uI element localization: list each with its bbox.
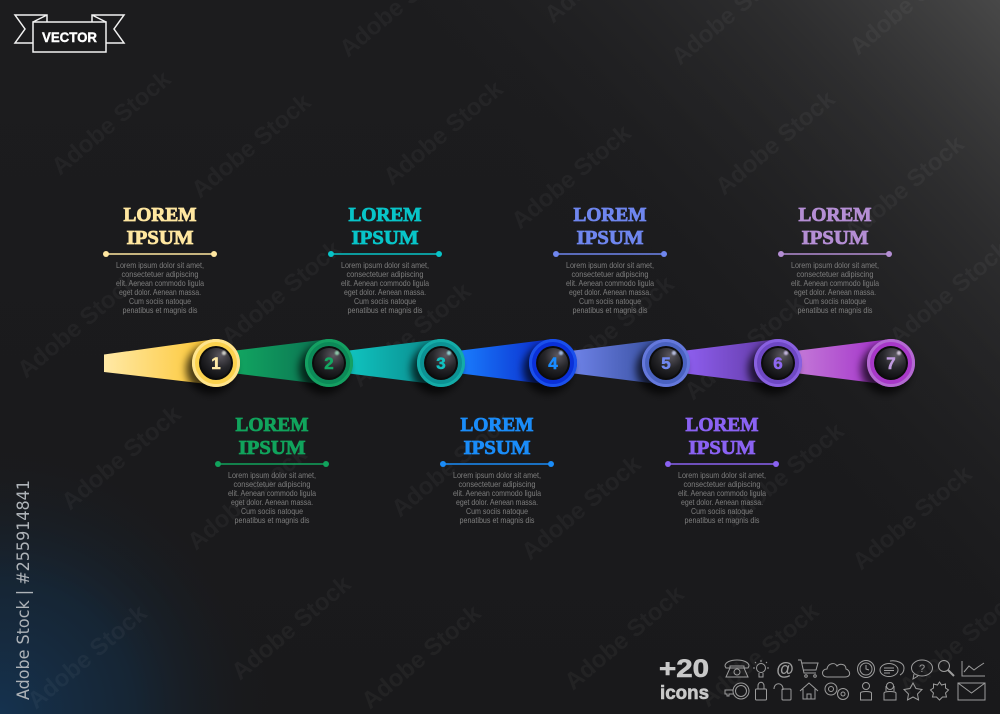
icon: woman bbox=[884, 682, 896, 700]
watermark pattern: Adobe Stock bbox=[227, 570, 357, 686]
vector ribbon badge bbox=[15, 15, 124, 52]
watermark pattern: Adobe Stock bbox=[23, 599, 153, 714]
icon: house bbox=[800, 683, 818, 699]
watermark pattern: Adobe Stock bbox=[507, 119, 637, 235]
text block 2: penatibus et magnis dis bbox=[234, 515, 310, 525]
watermark pattern: Adobe Stock bbox=[517, 450, 647, 566]
text block 7: Lorem ipsum dolor sit amet, bbox=[791, 260, 879, 270]
icon: lock bbox=[756, 682, 766, 700]
step 2 marker bbox=[299, 339, 353, 394]
text block 3: eget dolor. Aenean massa. bbox=[344, 287, 426, 297]
text block 5: penatibus et magnis dis bbox=[572, 305, 648, 315]
text block 4: Cum sociis natoque bbox=[466, 506, 528, 516]
watermark pattern: Adobe Stock bbox=[695, 597, 825, 713]
text block 7: penatibus et magnis dis bbox=[798, 305, 872, 315]
watermark pattern: Adobe Stock bbox=[680, 290, 810, 406]
text block 5: LOREM bbox=[574, 204, 647, 226]
text block 6: consectetuer adipiscing bbox=[684, 479, 761, 489]
text block 4: LOREM bbox=[460, 414, 534, 436]
watermark pattern: Adobe Stock bbox=[183, 440, 313, 556]
text block 3 bbox=[328, 204, 442, 315]
stock id vertical text: Adobe Stock | #255914841 bbox=[14, 480, 34, 700]
text block 5: elit. Aenean commodo ligula bbox=[566, 278, 654, 288]
text block 4: Lorem ipsum dolor sit amet, bbox=[453, 470, 541, 480]
text block 3: penatibus et magnis dis bbox=[348, 305, 422, 315]
watermark pattern: Adobe Stock bbox=[13, 268, 143, 384]
icon set bbox=[725, 659, 985, 700]
text block 3: IPSUM bbox=[352, 227, 419, 249]
text block 7: LOREM bbox=[798, 204, 872, 226]
+20 icons label bbox=[659, 655, 709, 704]
text block 1: LOREM bbox=[124, 204, 197, 226]
text block 5: eget dolor. Aenean massa. bbox=[569, 287, 651, 297]
watermark pattern: Adobe Stock bbox=[840, 130, 970, 246]
watermark pattern: Adobe Stock bbox=[848, 460, 978, 576]
watermark pattern: Adobe Stock bbox=[560, 580, 690, 696]
text block 3: elit. Aenean commodo ligula bbox=[341, 278, 429, 288]
step 6 marker bbox=[748, 339, 802, 394]
text block 4: elit. Aenean commodo ligula bbox=[453, 488, 541, 498]
watermark pattern: Adobe Stock bbox=[217, 235, 347, 351]
text block 6: Lorem ipsum dolor sit amet, bbox=[678, 470, 766, 480]
step 2 marker: 2 bbox=[324, 354, 334, 373]
text block 6 bbox=[665, 414, 779, 525]
step 5 marker bbox=[636, 339, 690, 394]
icon: person bbox=[860, 682, 872, 700]
text block 6: LOREM bbox=[686, 414, 759, 436]
vector ribbon badge: VECTOR bbox=[42, 29, 97, 45]
watermark pattern: Adobe Stock bbox=[550, 270, 680, 386]
icon: cart bbox=[798, 660, 818, 677]
text block 3: consectetuer adipiscing bbox=[346, 269, 424, 279]
watermark pattern: Adobe Stock bbox=[47, 65, 177, 181]
text block 5: Cum sociis natoque bbox=[579, 296, 641, 306]
watermark pattern: Adobe Stock bbox=[387, 407, 517, 523]
icon: star bbox=[904, 683, 922, 700]
text block 7: Cum sociis natoque bbox=[804, 296, 866, 306]
text block 1 bbox=[103, 204, 217, 315]
text block 6: IPSUM bbox=[688, 437, 756, 459]
text block 7: consectetuer adipiscing bbox=[796, 269, 874, 279]
text block 1: penatibus et magnis dis bbox=[122, 305, 198, 315]
step 1 marker: 1 bbox=[211, 354, 221, 373]
text block 7: IPSUM bbox=[802, 227, 869, 249]
icon: at sign: @ bbox=[776, 659, 794, 679]
icon: magnifier bbox=[938, 660, 954, 676]
step 1 marker bbox=[186, 339, 240, 394]
step 6 marker: 6 bbox=[773, 354, 783, 373]
text block 2: IPSUM bbox=[238, 437, 306, 459]
text block 7 bbox=[778, 204, 892, 315]
text block 4: IPSUM bbox=[464, 437, 531, 459]
step 7 marker bbox=[861, 339, 915, 394]
text block 1: IPSUM bbox=[126, 227, 194, 249]
icon: line chart bbox=[962, 661, 985, 676]
watermark pattern: Adobe Stock bbox=[187, 88, 317, 204]
icon: clock bbox=[858, 660, 874, 678]
text block 1: Cum sociis natoque bbox=[129, 296, 191, 306]
text block 5: IPSUM bbox=[576, 227, 644, 249]
text block 4 bbox=[440, 414, 554, 525]
text block 6: eget dolor. Aenean massa. bbox=[681, 497, 763, 507]
step 4 marker: 4 bbox=[548, 354, 558, 373]
timeline wedges bbox=[104, 339, 891, 385]
text block 6: elit. Aenean commodo ligula bbox=[678, 488, 766, 498]
+20 icons label: icons bbox=[660, 683, 709, 704]
watermark pattern: Adobe Stock bbox=[720, 417, 850, 533]
icon: light bulb bbox=[753, 660, 769, 677]
text block 1: elit. Aenean commodo ligula bbox=[116, 278, 204, 288]
watermark pattern: Adobe Stock bbox=[57, 400, 187, 516]
+20 icons label: +20 bbox=[659, 655, 709, 683]
watermark pattern: Adobe Stock bbox=[379, 75, 509, 191]
text block 5: Lorem ipsum dolor sit amet, bbox=[566, 260, 654, 270]
icon: gears bbox=[825, 683, 848, 700]
icon: envelope bbox=[958, 683, 985, 700]
step 4 marker bbox=[523, 339, 577, 394]
text block 6: Cum sociis natoque bbox=[691, 506, 753, 516]
icon: chat bubbles bbox=[880, 661, 904, 676]
step 5 marker: 5 bbox=[661, 354, 671, 373]
text block 3: LOREM bbox=[348, 204, 422, 226]
text block 7: eget dolor. Aenean massa. bbox=[794, 287, 876, 297]
icon: open lock bbox=[774, 684, 791, 700]
text block 6: penatibus et magnis dis bbox=[684, 515, 760, 525]
icon: cloud bbox=[822, 664, 850, 677]
text block 3: Lorem ipsum dolor sit amet, bbox=[341, 260, 429, 270]
text block 1: consectetuer adipiscing bbox=[122, 269, 199, 279]
step 3 marker: 3 bbox=[436, 354, 446, 373]
text block 2 bbox=[215, 414, 329, 525]
text block 2: elit. Aenean commodo ligula bbox=[228, 488, 316, 498]
text block 2: eget dolor. Aenean massa. bbox=[231, 497, 313, 507]
icon: telephone bbox=[725, 660, 749, 677]
watermark pattern: Adobe Stock bbox=[711, 85, 841, 201]
text block 4: penatibus et magnis dis bbox=[460, 515, 534, 525]
step 3 marker bbox=[411, 339, 465, 394]
icon: badge bbox=[930, 682, 948, 700]
text block 1: eget dolor. Aenean massa. bbox=[119, 287, 201, 297]
text block 4: eget dolor. Aenean massa. bbox=[456, 497, 538, 507]
text block 5: consectetuer adipiscing bbox=[572, 269, 649, 279]
text block 7: elit. Aenean commodo ligula bbox=[791, 278, 879, 288]
text block 4: consectetuer adipiscing bbox=[458, 479, 536, 489]
icon: question bubble bbox=[912, 660, 932, 679]
text block 1: Lorem ipsum dolor sit amet, bbox=[116, 260, 204, 270]
text block 2: Lorem ipsum dolor sit amet, bbox=[228, 470, 316, 480]
step 7 marker: 7 bbox=[886, 354, 896, 373]
text block 2: consectetuer adipiscing bbox=[234, 479, 311, 489]
text block 3: Cum sociis natoque bbox=[354, 296, 416, 306]
text block 2: LOREM bbox=[236, 414, 309, 436]
icon: key bbox=[725, 683, 749, 699]
icon: question bubble: ? bbox=[919, 663, 925, 675]
watermark pattern: Adobe Stock bbox=[357, 599, 487, 714]
watermark pattern: Adobe Stock bbox=[347, 277, 477, 393]
text block 5 bbox=[553, 204, 667, 315]
text block 2: Cum sociis natoque bbox=[241, 506, 303, 516]
